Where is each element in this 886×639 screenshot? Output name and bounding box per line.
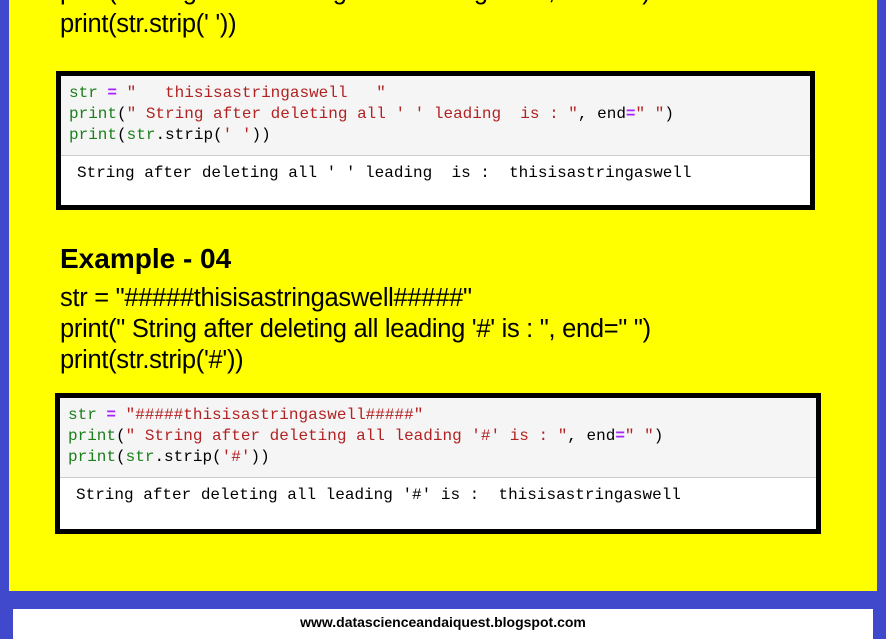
code cell 1: str = " thisisastringaswell " print(" String after deleting all ' ' leading is : ", end=" ") print(str.strip(' ')) <box>69 84 674 144</box>
text: example 04 code: str = "#####thisisastringaswell#####" print(" String after deleting all leading '#' is : ", end=" ") print(str.strip('#')) <box>60 284 651 374</box>
heading: Example 04: Example - 04 <box>60 243 231 274</box>
output 2: String after deleting all leading '#' is : thisisastringaswell <box>76 486 681 504</box>
footer <box>13 609 873 639</box>
code cell 1 <box>61 76 810 156</box>
output 1: String after deleting all ' ' leading is : thisisastringaswell <box>77 164 692 182</box>
code cell 2: str = "#####thisisastringaswell#####" print(" String after deleting all leading '#' is : ", end=" ") print(str.strip('#')) <box>68 406 663 466</box>
code box 1 <box>56 71 815 210</box>
text: strip line: print(str.strip(' ')) <box>60 10 236 38</box>
code cell 2 <box>60 398 816 478</box>
footer: www.datascienceandaiquest.blogspot.com <box>300 614 586 630</box>
code box 2 <box>55 393 821 534</box>
